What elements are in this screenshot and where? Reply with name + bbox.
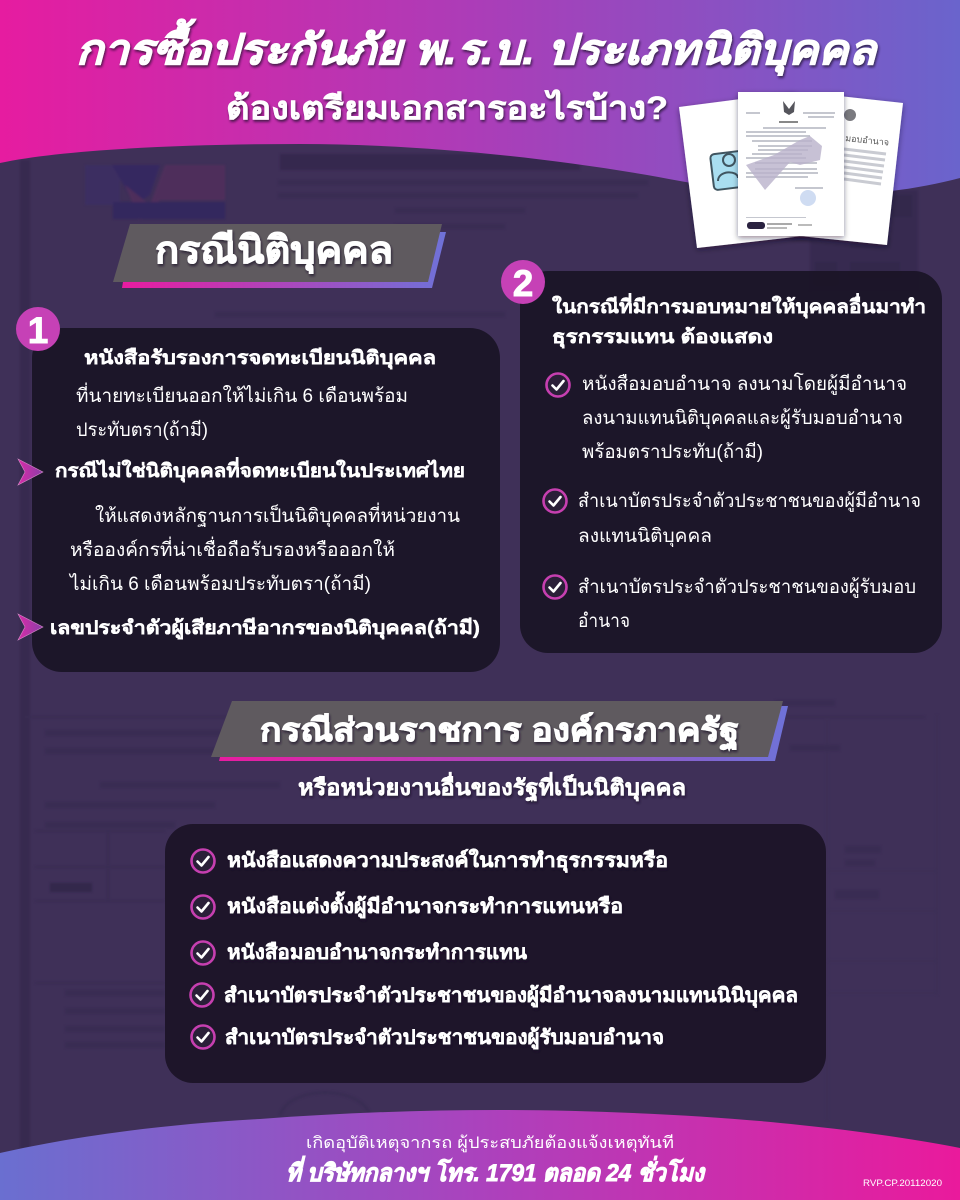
title: การซื้อประกันภัย พ.ร.บ. ประเภทนิติบุคคล <box>76 18 878 76</box>
panel 2 text: ธุรกรรมแทน ต้องแสดง <box>552 326 773 349</box>
panel 1 text: เลขประจำตัวผู้เสียภาษีอากรของนิติบุคคล(ถ้ามี) <box>50 617 480 640</box>
panel 3 list text <box>224 848 798 1051</box>
right document: power of attorney <box>790 95 903 245</box>
panel 3 list text: สำเนาบัตรประจำตัวประชาชนของผู้มีอำนาจลงนามแทนนินิบุคคล <box>224 984 798 1009</box>
footer notice text: เกิดอุบัติเหตุจากรถ ผู้ประสบภัยต้องแจ้งเหตุทันที <box>306 1134 674 1153</box>
panel 1 text <box>50 347 480 640</box>
panel 2 text: ลงแทนนิติบุคคล <box>578 526 712 548</box>
panel 2 text: พร้อมตราประทับ(ถ้ามี) <box>582 441 763 463</box>
panel 1 text: ประทับตรา(ถ้ามี) <box>76 419 208 441</box>
reference code: RVP.CP.20112020 <box>863 1178 942 1188</box>
badge 1: 1 <box>28 310 48 351</box>
check icons <box>544 374 570 598</box>
illustration: stack of documents <box>679 92 903 248</box>
left document: ID card copy <box>679 92 812 248</box>
arrow marker 2 <box>18 614 43 640</box>
center document: certificate <box>738 92 844 236</box>
panel 2 text: สำเนาบัตรประจำตัวประชาชนของผู้รับมอบ <box>578 577 916 598</box>
arrow marker 1 <box>18 459 43 485</box>
panel 1 text: กรณีไม่ใช่นิติบุคคลที่จดทะเบียนในประเทศไทย <box>55 457 465 483</box>
panel 2 text: หนังสือมอบอำนาจ ลงนามโดยผู้มีอำนาจ <box>582 372 907 395</box>
panel 1 text: ไม่เกิน 6 เดือนพร้อมประทับตรา(ถ้ามี) <box>68 573 371 595</box>
footer hotline: ที่ บริษัทกลางฯ โทร. 1791 ตลอด 24 ชั่วโมง <box>286 1155 706 1187</box>
badge 1 <box>16 307 60 351</box>
panel 2 text: สำเนาบัตรประจำตัวประชาชนของผู้มีอำนาจ <box>578 490 921 512</box>
panel 1: juristic person documents <box>16 307 500 672</box>
footer wave band <box>0 1110 960 1200</box>
panel 2 text: ในกรณีที่มีการมอบหมายให้บุคคลอื่นมาทำ <box>552 293 926 319</box>
badge 2: 2 <box>513 263 533 304</box>
panel 2: delegated authority documents <box>501 260 942 653</box>
right document: power of attorney: มอบอำนาจ <box>845 133 890 148</box>
panel 1 text: หนังสือรับรองการจดทะเบียนนิติบุคคล <box>84 347 436 370</box>
panel 3 list text: หนังสือแต่งตั้งผู้มีอำนาจกระทำการแทนหรือ <box>227 891 623 920</box>
subtitle: ต้องเตรียมเอกสารอะไรบ้าง? <box>226 89 668 126</box>
panel 3: government documents <box>165 824 826 1083</box>
panel 1 text: หรือองค์กรที่น่าเชื่อถือรับรองหรือออกให้ <box>70 536 395 561</box>
check icons <box>190 850 214 1048</box>
panel 1 text: ที่นายทะเบียนออกให้ไม่เกิน 6 เดือนพร้อม <box>76 382 408 407</box>
header wave band <box>0 0 960 194</box>
banner: juristic person case: กรณีนิติบุคคล <box>155 230 393 274</box>
banner: juristic person case <box>113 224 446 288</box>
panel 3 list text: หนังสือมอบอำนาจกระทำการแทน <box>227 941 527 964</box>
panel 3 list text: สำเนาบัตรประจำตัวประชาชนของผู้รับมอบอำนาจ <box>225 1026 664 1051</box>
banner: government agencies case: กรณีส่วนราชการ องค์กรภาครัฐ <box>260 712 739 751</box>
panel 3 list text: หนังสือแสดงความประสงค์ในการทำธุรกรรมหรือ <box>227 848 668 873</box>
panel 2 text: อำนาจ <box>578 611 630 632</box>
panel 2 text <box>552 293 926 632</box>
banner: government agencies case <box>211 701 788 761</box>
panel 1 text: ให้แสดงหลักฐานการเป็นนิติบุคคลที่หน่วยงาน <box>95 502 460 528</box>
badge 2 <box>501 260 545 304</box>
panel 2 text: ลงนามแทนนิติบุคคลและผู้รับมอบอำนาจ <box>582 408 903 430</box>
banner subheading: หรือหน่วยงานอื่นของรัฐที่เป็นนิติบุคคล <box>298 771 686 802</box>
